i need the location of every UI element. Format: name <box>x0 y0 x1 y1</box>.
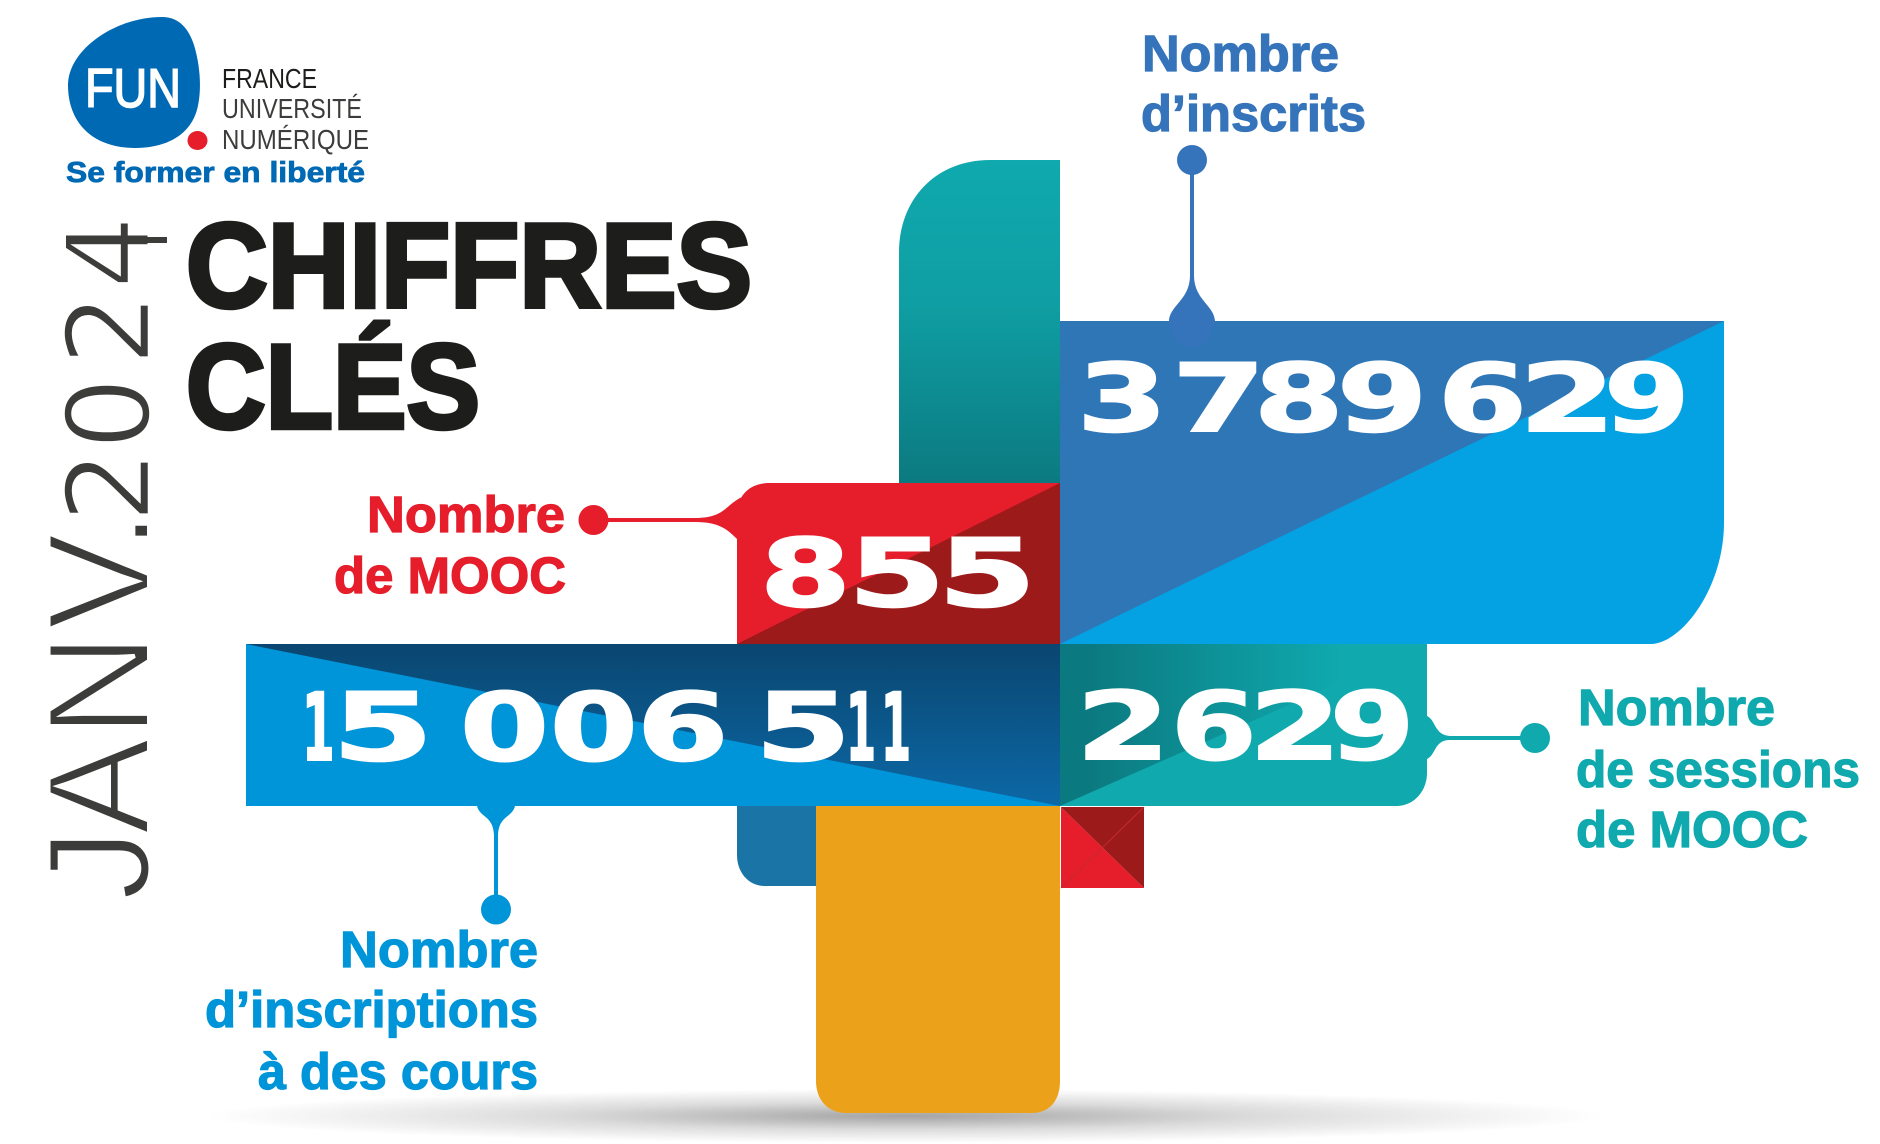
number: 15 006 511: 5 <box>332 674 434 782</box>
panel: gold block <box>816 806 1060 1113</box>
connector: MOOC <box>578 497 742 540</box>
number: 855 <box>760 520 1036 628</box>
number: 15 006 511: 1 <box>846 674 876 782</box>
connector: inscrits <box>1169 145 1215 347</box>
title <box>186 199 752 454</box>
number: 2629: 9 <box>1330 673 1414 782</box>
logo name: FRANCE <box>222 63 317 94</box>
logo name <box>222 63 369 155</box>
logo mark text: FUN <box>85 57 181 119</box>
tagline: Se former en liberté <box>66 157 365 189</box>
label: MOOC <box>334 486 566 604</box>
number: 3 789 629: 2 <box>1519 344 1615 454</box>
label: sessions: de sessions <box>1576 741 1860 798</box>
number: 3 789 629: 3 <box>1077 344 1167 454</box>
number: 3 789 629: 9 <box>1604 344 1690 454</box>
panel: MOOC <box>737 483 1060 644</box>
label: inscriptions <box>205 921 538 1100</box>
panel: inscriptions <box>246 644 1060 806</box>
label: inscriptions: à des cours <box>258 1043 538 1100</box>
number: 15 006 511: 0 <box>550 674 638 782</box>
icon: FUN blue blob <box>68 17 200 148</box>
number: 855: 5 <box>848 520 945 628</box>
vertical date: JANV. <box>17 510 180 901</box>
panel: red square <box>1061 807 1144 888</box>
label: MOOC: Nombre <box>367 486 565 543</box>
number: 2629 <box>1076 673 1414 782</box>
panel: dark blue tab <box>737 806 820 886</box>
label: sessions: de MOOC <box>1576 801 1808 858</box>
number: 15 006 511: 6 <box>637 674 729 782</box>
logo: France Université Numérique <box>66 17 369 189</box>
number: 15 006 511: 1 <box>302 674 335 782</box>
number: 3 789 629: 7 <box>1172 344 1266 454</box>
number: 15 006 511: 5 <box>754 674 851 782</box>
number: 15 006 511 <box>302 674 911 782</box>
number: 3 789 629: 6 <box>1438 344 1527 454</box>
label: inscriptions: Nombre <box>340 921 538 978</box>
vertical date <box>17 216 180 901</box>
label: MOOC: de MOOC <box>334 547 566 604</box>
number: 855: 5 <box>938 520 1036 628</box>
number: 3 789 629: 9 <box>1336 344 1427 454</box>
number: 15 006 511: 1 <box>881 674 911 782</box>
label: inscrits: d’inscrits <box>1141 85 1366 142</box>
title: CHIFFRES <box>186 199 752 333</box>
icon: red dot <box>188 131 208 150</box>
number: 2629: 6 <box>1171 673 1256 782</box>
connector: sessions <box>1427 716 1550 759</box>
panel: back teal block <box>899 160 1060 483</box>
ground shadow <box>205 1089 1605 1143</box>
label: inscriptions: d’inscriptions <box>205 981 538 1038</box>
label: sessions: Nombre <box>1578 679 1775 736</box>
number: 3 789 629 <box>1077 344 1690 454</box>
logo name: UNIVERSITÉ <box>222 93 362 124</box>
connector: inscriptions <box>477 806 515 924</box>
number: 3 789 629: 8 <box>1254 344 1344 454</box>
number: 855: 8 <box>760 520 851 628</box>
panel: sessions <box>1060 644 1427 806</box>
number: 2629: 2 <box>1076 673 1170 782</box>
panel: inscrits <box>1060 321 1724 644</box>
label: sessions <box>1576 679 1860 858</box>
label: inscrits: Nombre <box>1142 25 1339 82</box>
vertical date: 2024 <box>43 216 177 523</box>
title: CLÉS <box>186 320 480 454</box>
logo name: NUMÉRIQUE <box>222 124 369 155</box>
number: 15 006 511: 0 <box>460 674 549 782</box>
number: 2629: 2 <box>1249 673 1342 782</box>
label: inscrits <box>1141 25 1366 142</box>
